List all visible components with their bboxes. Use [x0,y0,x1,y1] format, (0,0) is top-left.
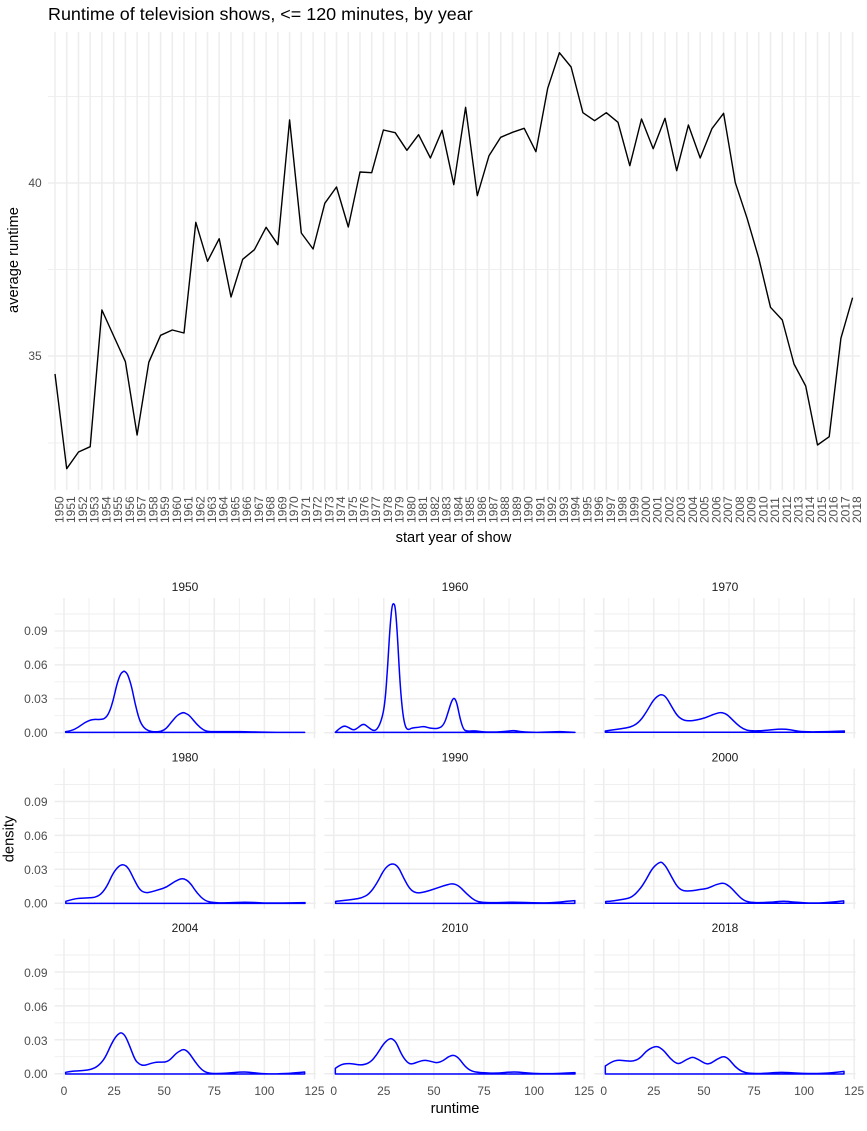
panel: density 1970 [594,580,856,738]
x axis year labels: 1989 [510,496,524,523]
panel: density 2004: 2004 [172,921,199,935]
x axis year labels: 1975 [346,496,360,523]
x axis year labels: 1993 [557,496,571,523]
x axis year labels: 1987 [486,496,500,523]
x axis year labels: 1981 [416,496,430,523]
panel: density 1990: 1990 [442,750,469,764]
x axis year labels: 2001 [651,496,665,523]
panel: density 1960 [324,580,586,738]
x axis ticks: facets: 125 [844,1084,865,1098]
x axis year labels: 1967 [252,496,266,523]
x axis year labels: 1956 [123,496,137,523]
x axis year labels: 1951 [64,496,78,523]
x axis ticks: facets: 75 [477,1084,491,1098]
x axis year labels: 1992 [545,496,559,523]
x axis year labels: 1988 [498,496,512,523]
x axis year labels: 1968 [264,496,278,523]
x axis year labels: 2017 [838,496,852,523]
x axis year labels: 1972 [311,496,325,523]
x axis year labels: 2004 [686,496,700,523]
x axis year labels: 1974 [334,496,348,523]
x axis year labels: 2014 [803,496,817,523]
panel: density 2004 [54,921,316,1079]
x axis year labels: 1969 [275,496,289,523]
y axis ticks: facets [24,624,48,1081]
y axis ticks: facets: 0.06 [24,1000,48,1014]
x axis year labels: 1963 [205,496,219,523]
x axis ticks: facets: 100 [794,1084,814,1098]
x axis year labels: 1953 [88,496,102,523]
x axis year labels: 1952 [76,496,90,523]
y axis ticks: top chart [28,176,42,363]
x axis ticks: facets: 50 [158,1084,171,1098]
panel: density 1950 [54,580,316,738]
x axis year labels: 1978 [381,496,395,523]
x axis year labels: 1977 [369,496,383,523]
y axis ticks: facets: 0.09 [24,795,48,809]
panel: density 1970: 1970 [712,580,739,594]
x axis ticks: facets [61,1084,865,1098]
x axis year labels: 1985 [463,496,477,523]
x axis year labels: 2005 [698,496,712,523]
x axis year labels: 1980 [404,496,418,523]
x axis year labels: 1966 [240,496,254,523]
x axis year labels: 2002 [662,496,676,523]
x axis year labels: 1970 [287,496,301,523]
y axis ticks: facets: 0.00 [24,1067,48,1081]
x axis year labels: 2016 [827,496,841,523]
y axis ticks: facets: 0.00 [24,726,48,740]
y axis ticks: facets: 0.09 [24,624,48,638]
x axis year labels: 1960 [170,496,184,523]
x axis year labels: 1958 [146,496,160,523]
x axis year labels: 1955 [111,496,125,523]
panel: density 2000 [594,750,856,909]
x axis year labels: 1995 [580,496,594,523]
x axis year labels: 1961 [182,496,196,523]
panel: density 1950: 1950 [172,580,199,594]
panel: density 1960: 1960 [442,580,469,594]
x axis year labels: 1971 [299,496,313,523]
x axis ticks: facets: 0 [330,1084,337,1098]
panel: density 2010 [324,921,586,1079]
x axis year labels: 2015 [815,496,829,523]
x axis year labels: 1998 [616,496,630,523]
x axis year labels: 1997 [604,496,618,523]
panel: density 2018 [594,921,856,1079]
x axis title: start year of show: start year of show [396,530,512,546]
x axis year labels: 2003 [674,496,688,523]
panel: density 2010: 2010 [442,921,469,935]
x axis year labels: 1994 [569,496,583,523]
x axis ticks: facets: 0 [600,1084,607,1098]
y axis title: average runtime: average runtime [6,207,22,313]
x axis year labels: 1996 [592,496,606,523]
x axis year labels: 1984 [451,496,465,523]
y axis title: density: density [2,815,18,862]
x axis year labels: 1962 [193,496,207,523]
y axis ticks: facets: 0.00 [24,896,48,910]
x axis year labels: 1983 [440,496,454,523]
x axis year labels: 1991 [533,496,547,523]
x axis ticks: facets: 75 [208,1084,221,1098]
panel: density 2018: 2018 [712,921,739,935]
x axis ticks: facets: 25 [377,1084,391,1098]
x axis year labels: 2008 [733,496,747,523]
x axis year labels: 1957 [135,496,149,523]
y axis ticks: facets: 0.03 [24,1034,48,1048]
x axis year labels: 1986 [475,496,489,523]
x axis ticks: facets: 125 [304,1084,325,1098]
y axis ticks: top chart: 35 [28,349,42,363]
x axis year labels [52,496,864,523]
y axis ticks: facets: 0.03 [24,692,48,706]
x axis year labels: 1965 [228,496,242,523]
x axis year labels: 2018 [850,496,864,523]
x axis year labels: 1976 [358,496,372,523]
y axis ticks: facets: 0.03 [24,863,48,877]
panel: density 1980 [54,750,316,909]
x axis year labels: 2013 [792,496,806,523]
x axis ticks: facets: 50 [427,1084,441,1098]
x axis year labels: 2012 [780,496,794,523]
x axis year labels: 1954 [99,496,113,523]
y axis ticks: top chart: 40 [28,176,42,190]
x axis ticks: facets: 0 [61,1084,68,1098]
panel: density 1980: 1980 [172,750,199,764]
x axis year labels: 1964 [217,496,231,523]
x axis ticks: facets: 100 [254,1084,275,1098]
x axis ticks: facets: 25 [647,1084,661,1098]
y axis ticks: facets: 0.06 [24,658,48,672]
x axis ticks: facets: 125 [574,1084,595,1098]
x axis year labels: 2009 [745,496,759,523]
x axis year labels: 2011 [768,497,782,523]
x axis year labels: 1959 [158,496,172,523]
runtime line [55,53,853,469]
x axis year labels: 1973 [322,496,336,523]
x axis year labels: 1950 [52,496,66,523]
x axis year labels: 1979 [393,496,407,523]
x axis year labels: 2000 [639,496,653,523]
line chart: average runtime by year [48,32,860,490]
y axis ticks: facets: 0.06 [24,829,48,843]
title: Runtime of television shows, <= 120 minutes, by year [48,4,473,24]
x axis year labels: 1990 [522,496,536,523]
panel: density 2000: 2000 [712,750,739,764]
x axis ticks: facets: 50 [697,1084,711,1098]
x axis title: runtime: runtime [431,1101,479,1117]
x axis year labels: 2006 [709,496,723,523]
x axis year labels: 1982 [428,496,442,523]
x axis ticks: facets: 75 [747,1084,761,1098]
x axis ticks: facets: 100 [524,1084,544,1098]
x axis year labels: 1999 [627,496,641,523]
y axis ticks: facets: 0.09 [24,966,48,980]
x axis year labels: 2010 [756,496,770,523]
panel: density 1990 [324,750,586,909]
x axis year labels: 2007 [721,496,735,523]
x axis ticks: facets: 25 [107,1084,121,1098]
